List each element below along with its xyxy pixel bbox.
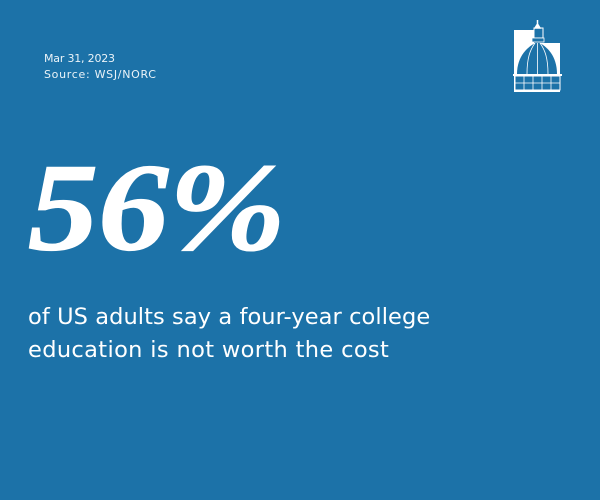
- source and date: Mar 31, 2023: [44, 52, 115, 65]
- description text: education is not worth the cost: [28, 337, 389, 363]
- big statistic: 56%: [28, 137, 286, 277]
- description text: of US adults say a four-year college: [28, 304, 430, 330]
- source and date: [44, 52, 157, 81]
- source and date: Source: WSJ/NORC: [44, 68, 157, 81]
- icon: capitol dome logo: [513, 20, 562, 92]
- description text: [28, 304, 430, 363]
